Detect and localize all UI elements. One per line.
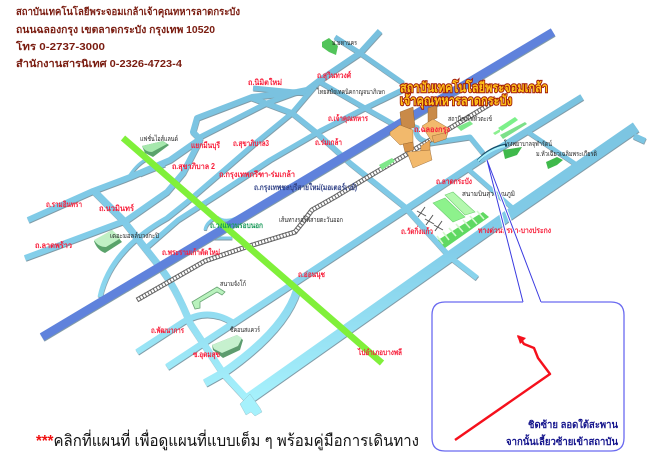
- road labels: แยกมีนบุรี: [191, 140, 221, 151]
- inset pointer lines: [487, 160, 541, 302]
- title: institute name on map: [400, 79, 548, 109]
- icon: airplanes: [417, 207, 443, 231]
- header: institute address: สำนักงานสารนิเทศ 0-2326-4723-4: [16, 58, 182, 70]
- landmark labels: ม.หัวเฉียวเฉลิมพระเกียรติ: [536, 150, 597, 158]
- shopping mall: Seacon Square: [212, 335, 243, 358]
- road labels: ถ.วัดกิ่งแก้ว: [401, 225, 433, 236]
- title: institute name on map: สถาบันเทคโนโลยีพระจอมเกล้า: [400, 79, 548, 95]
- road end cap: [240, 394, 262, 416]
- road labels: ถ.สุขาภิบาล 2: [172, 162, 215, 172]
- inset frame: [432, 302, 624, 451]
- red route arrow: [455, 336, 550, 440]
- landmark labels: สนามบินสุวรรณภูมิ: [462, 190, 515, 198]
- campus buildings: [390, 105, 450, 168]
- road labels: ถ.ลาดกระบัง: [436, 177, 472, 186]
- road labels: ถ.รามอินทรา: [46, 200, 82, 209]
- landmark labels: เดอะมอลล์บางกะปิ: [110, 232, 159, 240]
- red arrow head: [517, 335, 526, 344]
- landmark labels: ซีคอนสแควร์: [230, 326, 260, 334]
- header: institute address: ถนนฉลองกรุง เขตลาดกระบัง กรุงเทพ 10520: [16, 24, 215, 36]
- road labels: ถ.วงแหวนรอบนอก: [210, 221, 263, 230]
- road labels: ถ.ฉลองกรุง: [414, 125, 450, 135]
- railway: [137, 103, 492, 300]
- airport terminal buildings: [433, 192, 489, 248]
- shopping mall: The Mall Bangkapi: [94, 230, 122, 253]
- title: institute name on map: เจ้าคุณทหารลาดกระบัง: [400, 93, 512, 109]
- road labels: ถ.ร่มเกล้า: [315, 137, 342, 147]
- landmark labels: [110, 40, 597, 334]
- inset directions text: ชิดซ้าย ลอดใต้สะพาน: [528, 418, 618, 431]
- landmark labels: ไทยสมัยเทคนิคกาญจนาภิเษก: [316, 87, 385, 96]
- road labels: ถ.ลาดพร้าว: [35, 240, 72, 250]
- inset directions text: จากนั้นเลี้ยวซ้ายเข้าสถาบัน: [506, 434, 618, 448]
- footer note: ***คลิกที่แผนที่ เพื่อดูแผนที่แบบเต็ม ๆ พร้อมคู่มือการเดินทาง: [36, 429, 419, 451]
- green buildings: [322, 38, 563, 170]
- inset directions text: [506, 418, 618, 448]
- road labels: ถ.กรุงเทพกรีฑา-ร่มเกล้า: [219, 169, 295, 180]
- road labels: ถ.สุวินทวงศ์: [317, 70, 352, 81]
- road labels: ถ.นิมิตใหม่: [248, 77, 282, 87]
- outer ring road: [123, 138, 382, 363]
- road network: [25, 31, 645, 400]
- header: institute address: โทร 0-2737-3000: [15, 40, 106, 53]
- road labels: ถ.อ่อนนุช: [298, 270, 325, 280]
- road labels: ถ.เจ้าคุณทหาร: [328, 113, 369, 124]
- overpass highlight: [478, 146, 505, 161]
- road labels: ซ.อุดมสุข: [193, 350, 220, 360]
- expressway: [42, 32, 553, 337]
- road labels: ทางด่วนบูรพา-บางประกง: [478, 226, 551, 236]
- inset pointer line halo: [487, 160, 541, 302]
- road labels: ถ.นวมินทร์: [99, 203, 135, 213]
- overpass at inset location: [478, 145, 507, 161]
- road labels: ถ.พัฒนาการ: [151, 326, 185, 335]
- road labels: ไปอำเภอบางพลี: [357, 347, 402, 357]
- landmark labels: ม.มหานคร: [332, 40, 357, 47]
- landmark labels: เส้นทางรถไฟสายตะวันออก: [279, 215, 343, 224]
- Siam Jungle building: [192, 287, 225, 309]
- landmark labels: โรงพยาบาลจุฬารัตน์: [504, 139, 552, 148]
- shopping mall: Fashion Island: [142, 141, 169, 157]
- callout: inset direction map: [432, 160, 624, 451]
- road labels: ถ.สุขาภิบาล3: [233, 139, 269, 149]
- landmark labels: สถานีรถไฟหัวตะเข้: [448, 114, 492, 123]
- header: institute address: สถาบันเทคโนโลยีพระจอมเกล้าเจ้าคุณทหารลาดกระบัง: [16, 5, 240, 18]
- road labels: ถ.กรุงเทพชลบุรีสายใหม่(มอเตอร์เวย์): [254, 182, 357, 193]
- road labels: ถ.พระรามเก้าตัดใหม่: [162, 247, 220, 257]
- header: institute address: [15, 5, 240, 70]
- road labels: [35, 70, 551, 360]
- landmark labels: สนามจังโก้: [220, 279, 246, 288]
- landmark labels: แฟชั่นไอส์แลนด์: [140, 134, 178, 143]
